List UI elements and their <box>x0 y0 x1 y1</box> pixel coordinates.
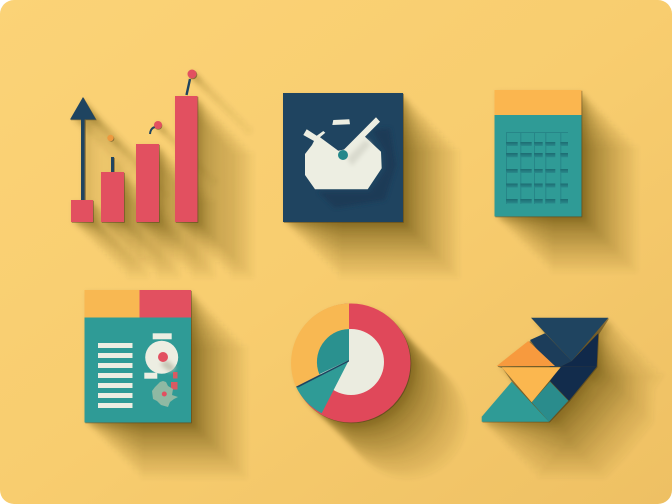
icon: calculator <box>494 90 582 216</box>
icon: tangram arrow <box>482 318 608 422</box>
orange header <box>494 90 582 115</box>
stopwatch dial and hand <box>303 117 382 189</box>
red ring segment <box>292 304 410 422</box>
dark orange triangle <box>497 341 555 366</box>
bars <box>71 96 198 222</box>
mid navy facet <box>530 333 572 367</box>
lower navy facet <box>550 367 597 401</box>
icon: stopwatch tile <box>283 93 403 222</box>
gear splat <box>152 372 178 407</box>
light orange triangle <box>502 367 561 402</box>
navy tile <box>283 93 403 222</box>
teal body <box>494 115 582 216</box>
wedge edge shadow <box>296 360 349 388</box>
teal base triangle <box>482 382 549 422</box>
teal page <box>84 317 191 422</box>
keypad grid <box>506 132 568 204</box>
orange header tab <box>84 290 140 318</box>
dark right facet <box>560 333 598 367</box>
orange ring segment <box>291 304 349 387</box>
gauge dial <box>144 333 178 379</box>
icon: donut chart <box>291 304 410 422</box>
white center <box>318 329 384 395</box>
text lines <box>98 343 132 408</box>
dial shadow <box>318 128 396 208</box>
bar markers <box>107 70 196 172</box>
icon: report document <box>84 290 191 422</box>
hand shadow on dial <box>347 140 371 166</box>
top navy triangle <box>531 318 608 361</box>
arrow <box>70 97 96 200</box>
teal inner sector <box>317 329 349 374</box>
teal connector band <box>532 382 568 422</box>
icon: rising bar chart with arrow <box>70 70 198 222</box>
center pivot <box>338 150 348 160</box>
red header tab <box>140 290 191 318</box>
top button <box>332 119 350 125</box>
teal outer wedge <box>296 360 349 413</box>
